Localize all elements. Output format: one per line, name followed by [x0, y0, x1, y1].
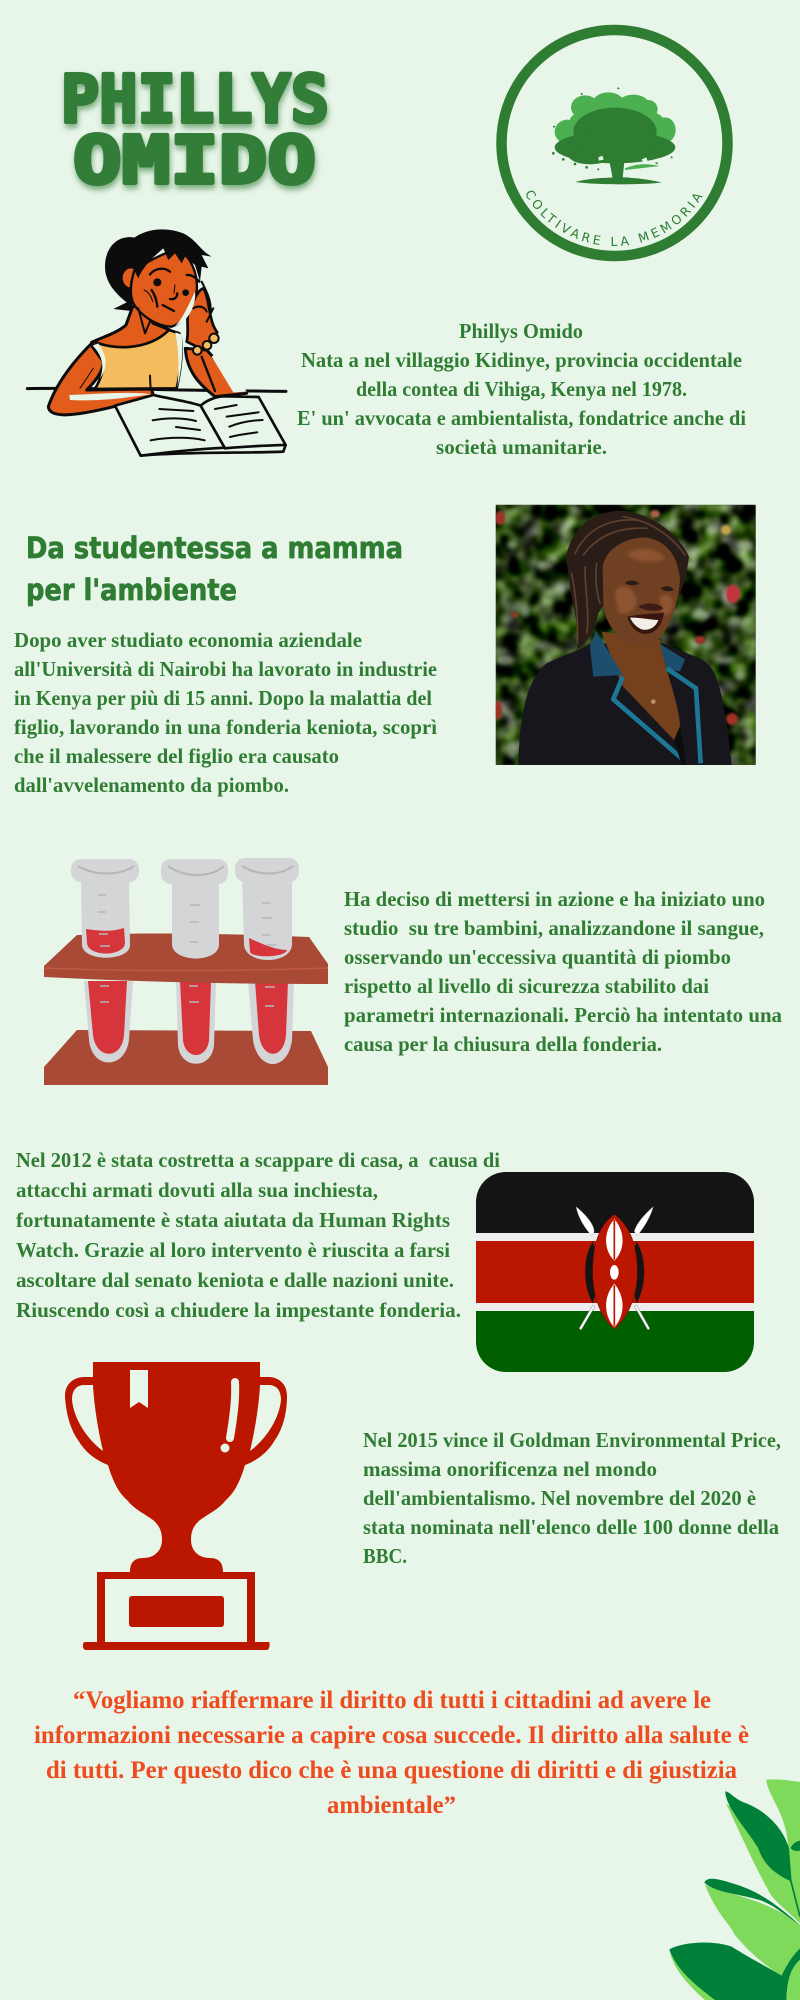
heading: da studentessa a mamma: Da studentessa a mamma	[26, 531, 403, 565]
paragraph: escape in 2012	[16, 1148, 500, 1322]
intro text: società umanitarie.	[436, 435, 607, 459]
paragraph: escape in 2012: fortunatamente è stata aiutata da Human Rights	[16, 1208, 450, 1232]
intro text: E' un' avvocata e ambientalista, fondatrice anche di	[297, 406, 746, 430]
title	[61, 61, 329, 199]
heading: da studentessa a mamma: per l'ambiente	[26, 573, 237, 607]
paragraph: blood study: rispetto al livello di sicurezza stabilito dai	[344, 974, 709, 998]
paragraph: goldman prize: BBC.	[363, 1544, 407, 1568]
paragraph: goldman prize	[363, 1428, 781, 1568]
title: PHILLYS	[61, 61, 329, 138]
paragraph: escape in 2012: Riuscendo così a chiudere la impestante fonderia.	[16, 1298, 461, 1322]
lower rack plate	[44, 1030, 328, 1085]
paragraph: studies and foundry: dall'avvelenamento da piombo.	[14, 773, 289, 797]
paragraph: studies and foundry: all'Università di Nairobi ha lavorato in industrie	[14, 657, 437, 681]
intro text: Phillys Omido	[459, 319, 583, 343]
quote: “Vogliamo riaffermare il diritto di tutti i cittadini ad avere le	[73, 1687, 711, 1714]
paragraph: goldman prize: dell'ambientalismo. Nel novembre del 2020 è	[363, 1486, 756, 1510]
illustration: girl reading	[27, 229, 286, 456]
paragraph: goldman prize: Nel 2015 vince il Goldman Environmental Price,	[363, 1428, 781, 1452]
logo: coltivare la memoria	[496, 24, 733, 262]
icon: trophy	[65, 1362, 287, 1650]
portrait photo	[494, 505, 756, 765]
paragraph: goldman prize: massima onorificenza nel mondo	[363, 1457, 657, 1481]
paragraph: escape in 2012: Nel 2012 è stata costretta a scappare di casa, a causa di	[16, 1148, 500, 1172]
paragraph: studies and foundry: figlio, lavorando in una fonderia keniota, scoprì	[14, 715, 437, 739]
quote: ambientale”	[327, 1792, 456, 1819]
quote: di tutti. Per questo dico che è una questione di diritti e di giustizia	[46, 1757, 737, 1784]
paragraph: blood study: Ha deciso di mettersi in azione e ha iniziato uno	[344, 887, 765, 911]
paragraph: studies and foundry: Dopo aver studiato economia aziendale	[14, 628, 362, 652]
paragraph: studies and foundry: che il malessere del figlio era causato	[14, 744, 339, 768]
heading: da studentessa a mamma	[26, 531, 403, 607]
title: OMIDO	[73, 122, 316, 199]
icon: tree	[552, 87, 676, 184]
logo caption: COLTIVARE LA MEMORIA	[526, 190, 703, 246]
paragraph: escape in 2012: Watch. Grazie al loro intervento è riuscita a farsi	[16, 1238, 450, 1262]
paragraph: escape in 2012: attacchi armati dovuti alla sua inchiesta,	[16, 1178, 378, 1202]
quote	[34, 1687, 749, 1819]
intro text: Nata a nel villaggio Kidinye, provincia occidentale	[301, 348, 742, 372]
icon: shield and spears	[576, 1207, 653, 1329]
paragraph: blood study: studio su tre bambini, analizzandone il sangue,	[344, 916, 764, 940]
upper rack plate	[44, 934, 328, 984]
decoration: leaves	[669, 1779, 800, 2000]
intro text	[297, 319, 746, 459]
paragraph: studies and foundry	[14, 628, 437, 797]
paragraph: blood study: osservando un'eccessiva quantità di piombo	[344, 945, 731, 969]
paragraph: blood study	[344, 887, 782, 1056]
paragraph: studies and foundry: in Kenya per più di 15 anni. Dopo la malattia del	[14, 686, 432, 710]
quote: informazioni necessarie a capire cosa succede. Il diritto alla salute è	[34, 1722, 749, 1749]
paragraph: escape in 2012: ascoltare dal senato keniota e dalle nazioni unite.	[16, 1268, 454, 1292]
paragraph: blood study: causa per la chiusura della fonderia.	[344, 1032, 662, 1056]
paragraph: blood study: parametri internazionali. Perciò ha intentato una	[344, 1003, 782, 1027]
intro text: della contea di Vihiga, Kenya nel 1978.	[356, 377, 687, 401]
paragraph: goldman prize: stata nominata nell'elenco delle 100 donne della	[363, 1515, 779, 1539]
illustration: test tubes in rack	[44, 858, 328, 1085]
icon: kenya flag	[476, 1172, 754, 1372]
